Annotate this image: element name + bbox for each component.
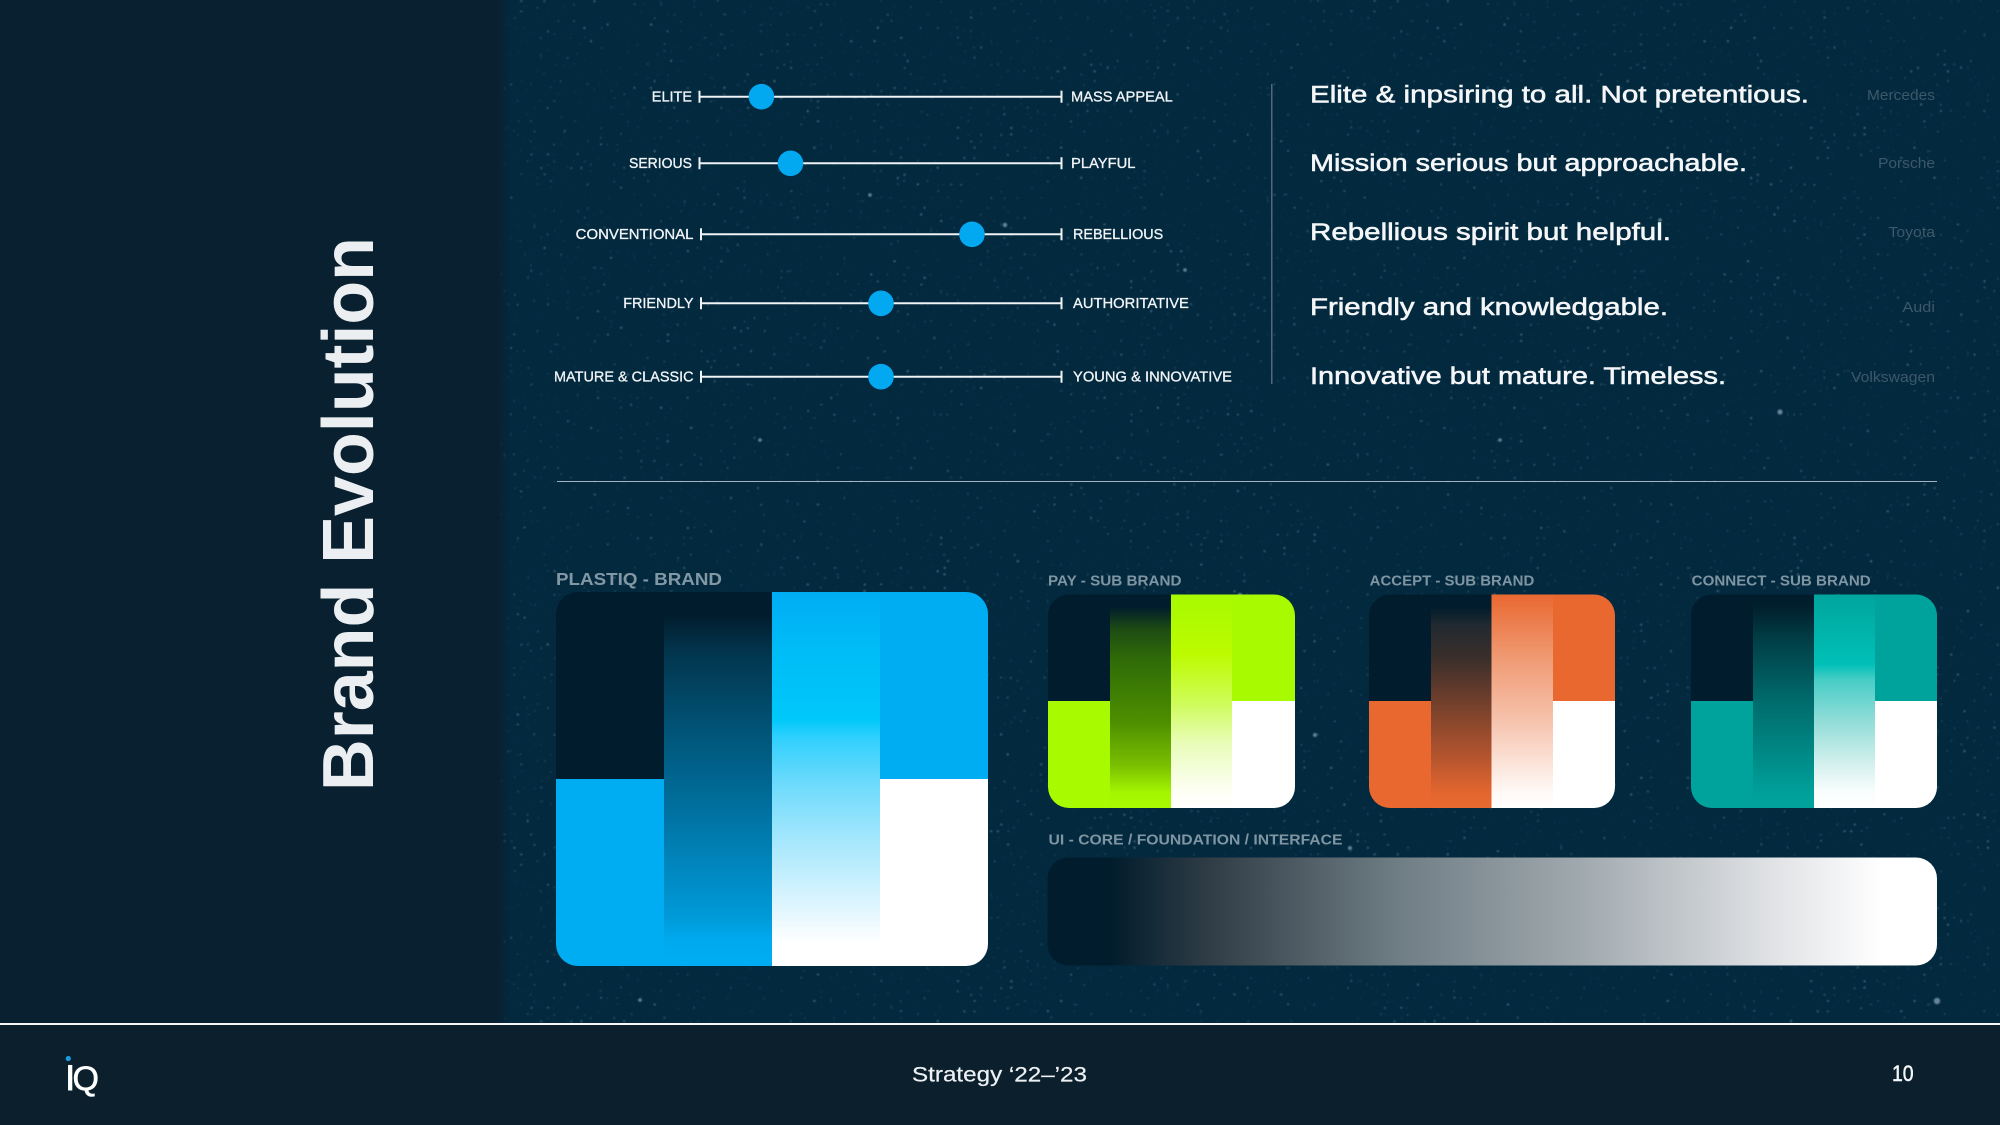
- slider: conventional to rebellious: [576, 222, 1163, 247]
- panel: Accept sub brand palette: [1369, 573, 1615, 808]
- slider: serious to playful: SERIOUS: [629, 156, 692, 172]
- footer: [0, 1023, 2000, 1125]
- brand positioning statements: Mission serious but approachable.: [1310, 150, 1747, 177]
- brand attribute sliders: [554, 84, 1232, 390]
- heading: Pay sub brand: PAY - SUB BRAND: [1048, 573, 1182, 589]
- page number: 10: [1892, 1061, 1914, 1086]
- comparable brand names: Toyota: [1888, 224, 1936, 241]
- comparable brand names: Audi: [1902, 299, 1935, 316]
- comparable brand names: Volkswagen: [1851, 369, 1935, 386]
- panel: UI core palette: [1048, 833, 1937, 966]
- swatch: Accept gradient blocks: [1369, 594, 1615, 808]
- left title panel: [0, 0, 511, 1024]
- slider: elite to mass appeal: [652, 84, 1173, 109]
- logo: iQ: [64, 1048, 99, 1102]
- slider: friendly to authoritative: [623, 290, 1189, 316]
- slider: elite to mass appeal: ELITE: [652, 90, 692, 106]
- slider: friendly to authoritative: FRIENDLY: [623, 296, 694, 312]
- heading: UI core: UI - CORE / FOUNDATION / INTERFACE: [1048, 833, 1343, 849]
- slider: friendly to authoritative: AUTHORITATIVE: [1073, 296, 1189, 312]
- swatch: Pay gradient blocks: [1048, 594, 1295, 808]
- brand positioning statements: Rebellious spirit but helpful.: [1310, 219, 1671, 246]
- heading: Connect sub brand: CONNECT - SUB BRAND: [1692, 573, 1871, 589]
- panel: Plastiq brand palette: [556, 569, 988, 966]
- swatch: Plastiq gradient blocks: [556, 592, 988, 966]
- slider: elite to mass appeal: MASS APPEAL: [1071, 90, 1173, 106]
- heading: Plastiq brand: PLASTIQ - BRAND: [556, 569, 722, 589]
- title: Brand Evolution: [309, 237, 389, 791]
- swatch: Connect gradient blocks: [1691, 594, 1937, 808]
- comparable brand names: Porsche: [1878, 155, 1935, 172]
- comparable brand names: Mercedes: [1867, 87, 1935, 104]
- panel: Pay sub brand palette: [1048, 573, 1295, 808]
- brand positioning statements: Elite & inpsiring to all. Not pretentious.: [1310, 82, 1809, 109]
- slider: serious to playful: [629, 150, 1136, 176]
- swatch: UI gradient bar: [1048, 858, 1937, 966]
- brand positioning statements: Innovative but mature. Timeless.: [1310, 363, 1726, 390]
- deck name: Strategy ‘22–’23: [912, 1064, 1087, 1087]
- heading: Accept sub brand: ACCEPT - SUB BRAND: [1370, 573, 1534, 589]
- slider: mature and classic to young and innovative: YOUNG & INNOVATIVE: [1073, 370, 1232, 386]
- panel: Connect sub brand palette: [1691, 573, 1937, 808]
- slider: conventional to rebellious: REBELLIOUS: [1073, 227, 1163, 243]
- logo: iQ: Q: [72, 1060, 99, 1098]
- slider: serious to playful: PLAYFUL: [1071, 156, 1136, 172]
- slider: mature and classic to young and innovative: [554, 364, 1232, 390]
- slider: conventional to rebellious: CONVENTIONAL: [576, 227, 694, 243]
- brand positioning statements: Friendly and knowledgable.: [1310, 294, 1668, 321]
- brand positioning statements: [1310, 82, 1809, 390]
- comparable brand names: [1851, 87, 1936, 386]
- logo: iQ: ı: [64, 1048, 77, 1102]
- slider: mature and classic to young and innovative: MATURE & CLASSIC: [554, 370, 694, 386]
